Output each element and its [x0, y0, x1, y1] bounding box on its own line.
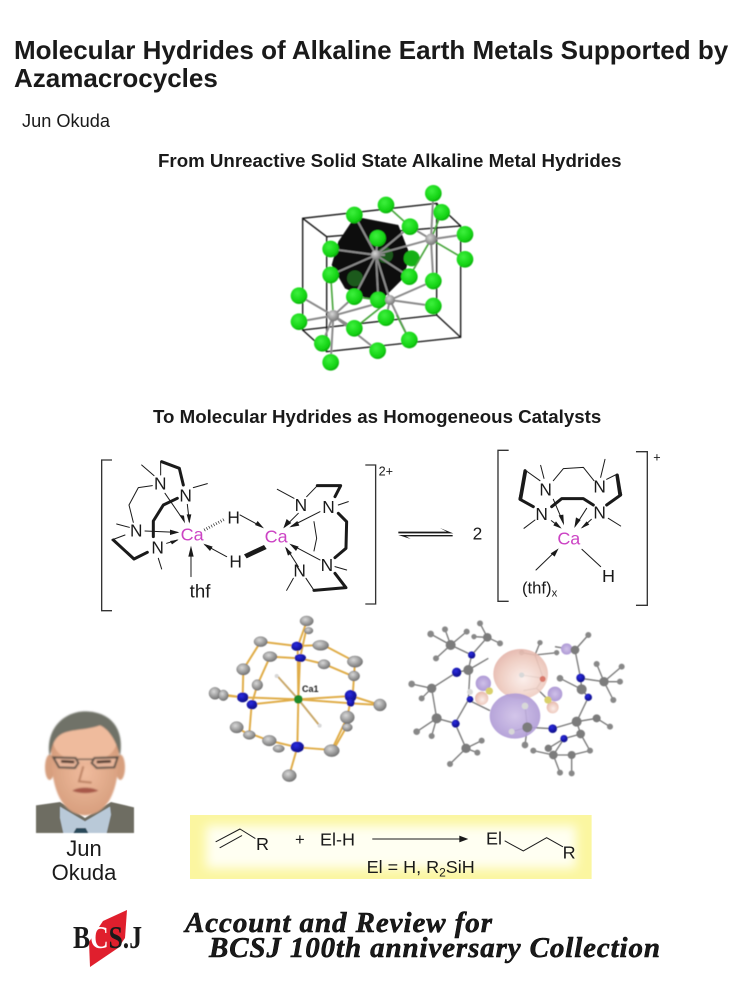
hydride and thf labels — [522, 566, 615, 600]
crystal structure — [291, 185, 473, 371]
left macrocycle: Ca — [181, 525, 204, 545]
atom label: Ca1 — [302, 684, 318, 694]
alkene substrate: R — [256, 834, 269, 854]
author photo — [36, 711, 134, 885]
orbital lobes — [475, 643, 572, 739]
calcium centre — [536, 499, 601, 570]
right macrocycle: N — [321, 555, 333, 575]
charge label: 2+ — [379, 465, 393, 479]
reaction scheme panel — [190, 815, 592, 879]
equilibrium arrows and monocation — [398, 450, 661, 605]
author caption: Jun — [66, 836, 102, 861]
right macrocycle: N — [322, 497, 335, 517]
hydride and thf labels: x — [552, 588, 558, 600]
right macrocycle: Ca — [265, 527, 288, 547]
left macrocycle: N — [154, 474, 167, 494]
title — [14, 35, 729, 93]
charge label: + — [653, 451, 661, 465]
journal collection label — [183, 907, 660, 964]
BCSJ logo — [73, 910, 142, 967]
bridging hydrides: H — [227, 508, 240, 528]
hydride atoms — [275, 674, 322, 728]
right macrocycle: N — [293, 560, 306, 580]
right bracket — [365, 465, 376, 604]
calcium centre: Ca — [557, 529, 580, 549]
title: Molecular Hydrides of Alkaline Earth Metals Supported by — [14, 35, 729, 65]
X-ray crystal structure — [209, 616, 386, 782]
conditions: El = H, R — [367, 857, 439, 877]
calcium atom — [294, 695, 303, 704]
portrait — [36, 711, 134, 833]
heading: to molecular hydrides: To Molecular Hydrides as Homogeneous Catalysts — [153, 406, 601, 427]
conditions: SiH — [446, 857, 475, 877]
bridging hydrides — [203, 508, 267, 572]
conditions: 2 — [439, 865, 446, 879]
dicationic calcium hydride structure — [102, 460, 393, 611]
journal collection label: BCSJ 100th anniversary Collection — [208, 932, 660, 964]
left bracket — [498, 450, 509, 601]
macrocycle: N — [593, 477, 606, 497]
left macrocycle: N — [130, 520, 143, 540]
product — [486, 828, 576, 862]
journal collection label: Account and Review for — [183, 907, 493, 939]
author caption — [52, 836, 117, 885]
plus reagent: + — [295, 830, 305, 849]
macrocycle: N — [535, 504, 548, 524]
BCSJ logo: BCS.J — [73, 919, 142, 955]
thf donor — [188, 546, 211, 602]
hydride and thf labels: (thf) — [522, 578, 552, 597]
bridging hydrides: H — [229, 552, 242, 572]
left macrocycle: N — [151, 538, 164, 558]
right macrocycle — [265, 486, 348, 590]
author caption: Okuda — [52, 860, 117, 885]
product: R — [563, 842, 576, 862]
right macrocycle: N — [295, 495, 307, 515]
right bracket — [636, 452, 647, 605]
product: El — [486, 828, 502, 848]
yellow background — [190, 815, 592, 879]
author name: Jun Okuda — [22, 111, 111, 131]
left bracket — [102, 460, 112, 611]
heading: from solid state hydrides: From Unreactive Solid State Alkaline Metal Hydrides — [158, 150, 622, 171]
reaction arrow — [373, 836, 468, 842]
macrocycle: N — [539, 479, 552, 499]
left macrocycle — [112, 462, 207, 569]
macrocycle: N — [593, 503, 606, 523]
alkene substrate — [216, 829, 269, 854]
left macrocycle: N — [179, 486, 192, 506]
equilibrium arrows — [398, 528, 453, 539]
thf donor: thf — [190, 581, 211, 602]
DFT molecular orbital model — [408, 620, 625, 776]
macrocycle — [518, 459, 622, 528]
hydride and thf labels: H — [602, 566, 615, 586]
stoichiometric coefficient: 2 — [473, 523, 482, 543]
title: Azamacrocycles — [14, 63, 218, 93]
reaction scheme panel: El-H — [320, 829, 355, 849]
